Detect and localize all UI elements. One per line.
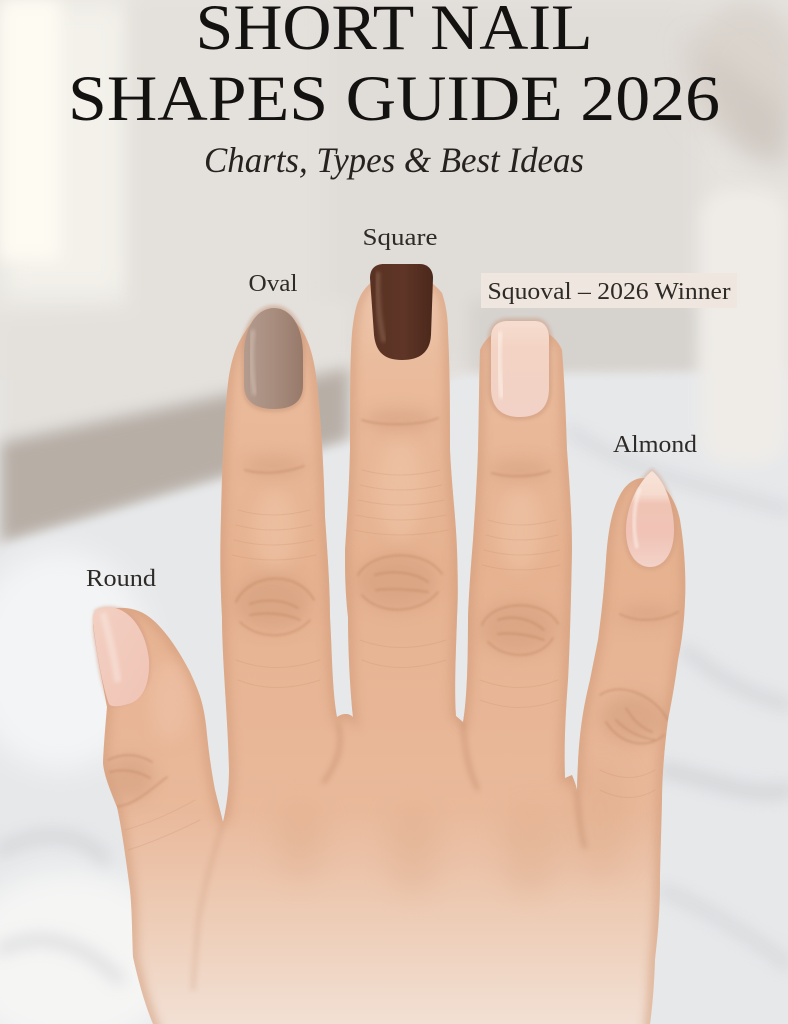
title: SHAPES GUIDE 2026 — [68, 63, 720, 135]
label: square: Square — [362, 225, 438, 251]
nail: oval — [241, 305, 306, 412]
nail: squoval — [488, 318, 552, 420]
label: round: Round — [86, 566, 156, 592]
finger centre highlights — [150, 440, 542, 740]
label: squoval 2026 winner: Squoval – 2026 Winner — [488, 279, 730, 305]
gaps between fingers and hand creases — [193, 722, 585, 990]
subtitle: Charts, Types & Best Ideas — [204, 140, 584, 180]
back of hand tan patches — [290, 812, 617, 888]
label: oval: Oval — [248, 271, 298, 297]
skin ridges — [125, 470, 655, 850]
knuckle shadows — [106, 410, 677, 800]
knuckle creases — [108, 418, 678, 807]
nail: square — [370, 264, 433, 360]
hand — [93, 264, 686, 1024]
nail: round — [93, 607, 150, 707]
title — [68, 0, 720, 135]
label: almond: Almond — [613, 432, 697, 458]
label: squoval 2026 winner — [481, 273, 737, 308]
nail: almond — [623, 468, 677, 570]
finger edge shading — [93, 272, 685, 1024]
marble veins — [0, 430, 788, 980]
